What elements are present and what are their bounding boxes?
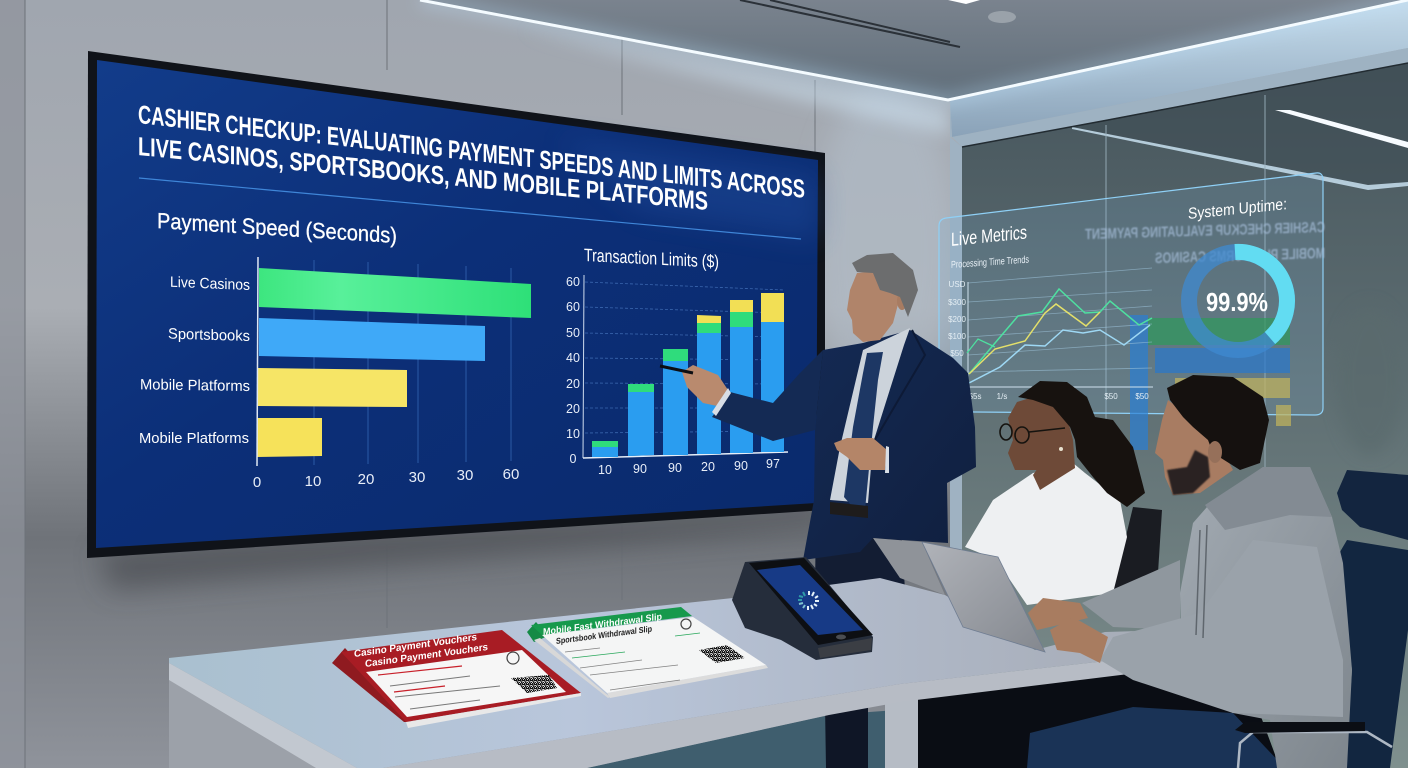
- horizontal bar chart: payment speed: 0: [253, 474, 261, 491]
- line chart: processing time trends: $200: [948, 315, 966, 324]
- wall shadow under screen: [100, 500, 830, 590]
- donut gauge 99.9%: [1189, 252, 1287, 350]
- suit jacket: [803, 330, 976, 560]
- conference table: [169, 578, 1178, 768]
- line chart: processing time trends: $50: [950, 349, 964, 358]
- seated woman: [965, 381, 1145, 605]
- label: processing time trends: Processing Time Trends: [951, 255, 1029, 271]
- holographic live metrics panel: [939, 173, 1325, 450]
- woman's chair: [1113, 507, 1162, 600]
- floor and under-table area: [587, 660, 1280, 768]
- glasses: [1000, 424, 1065, 443]
- face: [1008, 395, 1073, 470]
- stacked column chart: transaction limits: 97: [766, 457, 780, 471]
- far sleeve: [1082, 560, 1180, 630]
- horizontal bar chart: payment speed: 30: [409, 469, 425, 486]
- lower hand: [834, 438, 887, 470]
- screen title: LIVE CASINOS, SPORTSBOOKS, AND MOBILE PLATFORMS: [138, 131, 708, 216]
- line chart: processing time trends: $300: [948, 298, 966, 307]
- line chart: processing time trends: $5s: [969, 392, 981, 401]
- stacked column chart: transaction limits: 10: [566, 427, 580, 441]
- heading: live metrics: Live Metrics: [951, 222, 1027, 251]
- chair armrest: [1238, 732, 1392, 768]
- hands: [1028, 598, 1088, 630]
- stacked column chart: transaction limits: 60: [566, 275, 580, 289]
- tie: [844, 352, 883, 512]
- line chart: processing time trends: USD: [949, 280, 966, 289]
- laptops: [873, 538, 1045, 652]
- drawstring: [1196, 525, 1207, 638]
- stacked column chart: transaction limits: 90: [668, 461, 682, 475]
- extended arm: [712, 350, 823, 441]
- payment terminal: [732, 557, 873, 660]
- white blouse: [965, 463, 1127, 605]
- line chart: processing time trends: $50: [1104, 392, 1118, 401]
- near sleeve: [1100, 540, 1343, 717]
- casino payment vouchers stack: Casino Payment Vouchers: [365, 642, 488, 670]
- reflected screen content: MOBILE PLATFORMS CASINOS: [1155, 245, 1325, 267]
- sports withdrawal slip stack: [527, 607, 768, 698]
- grey hair: [852, 253, 918, 317]
- stacked column chart: transaction limits: [566, 245, 788, 477]
- reflected screen content: [1085, 219, 1325, 450]
- horizontal bar chart: payment speed: [139, 208, 531, 491]
- ceiling with LED cove: [420, 0, 1408, 137]
- reflected screen content: CASHIER CHECKUP EVALUATING PAYMENT: [1085, 219, 1325, 243]
- hood: [1205, 467, 1332, 530]
- presenter legs: [815, 510, 905, 768]
- presenter: [660, 253, 976, 560]
- stacked column chart: transaction limits: 10: [598, 463, 612, 477]
- hair: [1167, 375, 1269, 470]
- line chart: processing time trends: $50: [1135, 392, 1149, 401]
- line chart: processing time trends: [948, 268, 1153, 401]
- stacked column chart: transaction limits: 0: [570, 452, 577, 466]
- stacked column chart: transaction limits: 40: [566, 351, 580, 365]
- screen title: [138, 99, 805, 216]
- sports withdrawal slip stack: Sportsbook Withdrawal Slip: [556, 624, 652, 646]
- jeans: [1027, 707, 1285, 768]
- line chart: processing time trends: 1/s: [997, 392, 1007, 401]
- casino payment vouchers stack: [332, 630, 581, 728]
- stacked column chart: transaction limits: 20: [701, 460, 715, 474]
- stacked column chart: transaction limits: 50: [566, 326, 580, 340]
- horizontal bar chart: payment speed: Live Casinos: [170, 274, 250, 294]
- pointing hand: [682, 365, 728, 407]
- horizontal bar chart: payment speed: Mobile Platforms: [139, 430, 249, 447]
- face: [1155, 400, 1233, 495]
- belt: [830, 502, 868, 518]
- stacked column chart: transaction limits: 90: [734, 459, 748, 473]
- casino payment vouchers stack: Casino Payment Vouchers: [354, 632, 477, 660]
- face: [847, 270, 900, 342]
- pen: [660, 366, 693, 373]
- lapel: [873, 330, 925, 443]
- curly hair: [1018, 381, 1145, 507]
- horizontal bar chart: payment speed: 30: [457, 467, 473, 484]
- horizontal bar chart: payment speed: Mobile Platforms: [140, 376, 250, 395]
- right wall corner strip: [950, 137, 962, 560]
- hoodie body: [1180, 467, 1352, 768]
- horizontal bar chart: payment speed: 60: [503, 466, 519, 483]
- seated man: [1027, 375, 1408, 768]
- stacked column chart: transaction limits: 20: [566, 377, 580, 391]
- stacked column chart: transaction limits: 90: [633, 462, 647, 476]
- horizontal bar chart: payment speed: Sportsbooks: [168, 326, 250, 345]
- sports withdrawal slip stack: Mobile Fast Withdrawal Slip: [543, 612, 662, 638]
- chart heading: transaction limits: Transaction Limits ($): [584, 245, 719, 272]
- label: system uptime: System Uptime:: [1188, 195, 1287, 223]
- stacked column chart: transaction limits: 60: [566, 300, 580, 314]
- chart heading: payment speed: Payment Speed (Seconds): [157, 208, 397, 248]
- wall-mounted display: [87, 51, 825, 558]
- chair back: [1337, 540, 1408, 768]
- terminal screen: [757, 565, 863, 635]
- stacked column chart: transaction limits: 20: [566, 402, 580, 416]
- shirt: [830, 328, 910, 503]
- donut gauge 99.9%: 99.9%: [1206, 287, 1268, 317]
- chair headrest: [1337, 470, 1408, 540]
- horizontal bar chart: payment speed: 10: [305, 473, 321, 490]
- screen title: CASHIER CHECKUP: EVALUATING PAYMENT SPEEDS AND LIMITS ACROSS: [138, 99, 805, 204]
- horizontal bar chart: payment speed: 20: [358, 471, 374, 488]
- beard: [1167, 450, 1210, 495]
- loading spinner: [798, 591, 819, 610]
- line chart: processing time trends: $100: [948, 332, 966, 341]
- glass wall: [952, 48, 1408, 768]
